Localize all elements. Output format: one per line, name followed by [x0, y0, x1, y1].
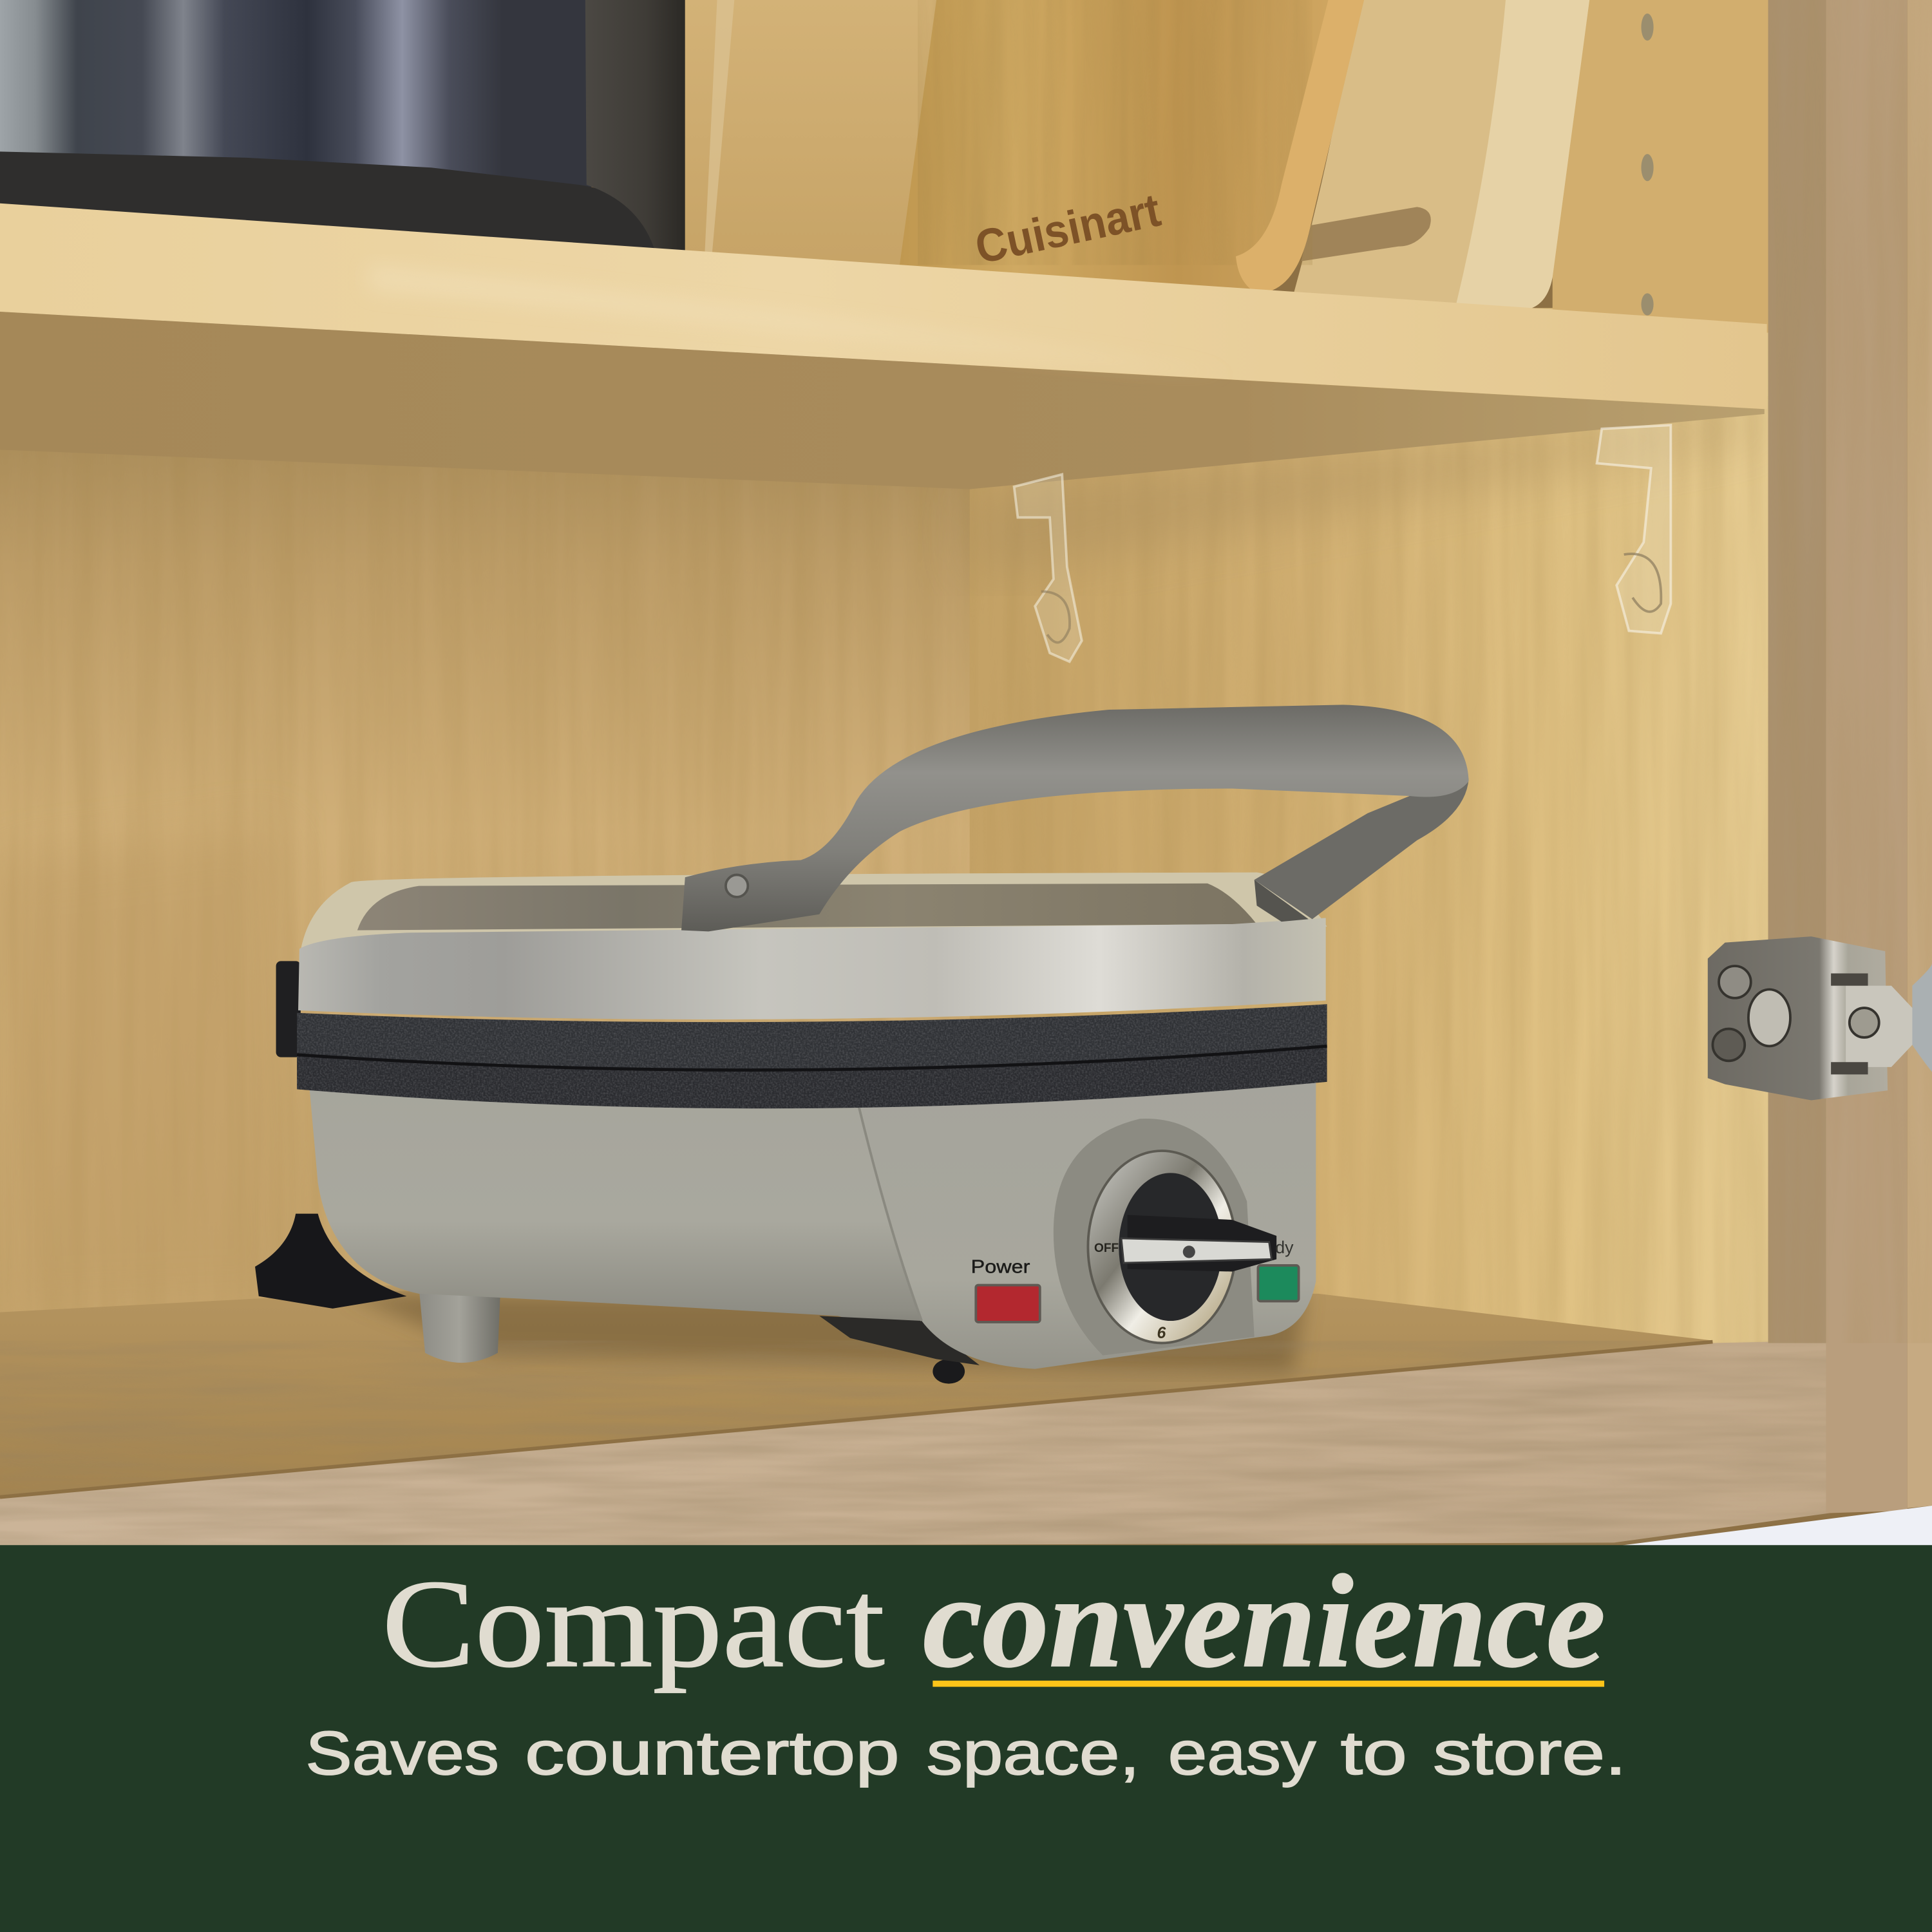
small front foot — [933, 1359, 965, 1384]
panel seam — [859, 1106, 922, 1321]
yellow underline — [933, 1681, 1604, 1687]
floor shelf front edge — [0, 1341, 1830, 1548]
upper shelf contents wall — [1553, 0, 1769, 333]
top shelf front edge — [0, 204, 1767, 409]
lower black band — [297, 1045, 1327, 1108]
subheading: Saves — [305, 1719, 499, 1788]
subheading: space, — [927, 1719, 1140, 1788]
heading word: convenience: convenience — [923, 1548, 1605, 1695]
cabinet floor shelf — [0, 1291, 1712, 1499]
black dial — [1119, 1173, 1222, 1321]
hinge screws — [1712, 966, 1879, 1061]
base underside — [819, 1316, 980, 1365]
rear clip — [276, 961, 301, 1057]
power label: Power — [971, 1256, 1030, 1277]
subheading: to — [1341, 1719, 1407, 1788]
subheading: store. — [1433, 1719, 1627, 1788]
cabinet back wall — [0, 419, 986, 1331]
lid rim — [299, 873, 1327, 959]
rear foot — [419, 1287, 500, 1363]
top shelf underside — [0, 312, 1765, 489]
cabinet side wall — [970, 308, 1770, 1368]
subheading: easy — [1168, 1719, 1316, 1788]
bamboo cutting board — [900, 0, 1364, 293]
lid stainless band — [298, 918, 1326, 1019]
red power light — [976, 1285, 1040, 1322]
hinge — [1708, 936, 1932, 1101]
green ready light — [1258, 1265, 1299, 1301]
cabinet frame right — [1768, 0, 1932, 1513]
heading — [382, 1548, 1605, 1695]
dial number: 6 — [1157, 1324, 1166, 1342]
beech cutting board — [1294, 0, 1589, 310]
pale cutting board — [685, 0, 949, 277]
dial recess — [1054, 1119, 1255, 1356]
dial lever — [1121, 1215, 1276, 1271]
panel: caption band — [0, 1545, 1932, 1932]
band texture — [297, 1005, 1327, 1108]
ready label fragment: dy — [1275, 1238, 1294, 1257]
upper black band — [297, 1004, 1327, 1070]
lower body — [308, 1072, 936, 1343]
white sliver — [1614, 1506, 1932, 1546]
OFF mark: OFF — [1094, 1242, 1119, 1255]
lid top surface — [357, 884, 1257, 931]
peg holes — [1641, 14, 1654, 316]
subheading — [305, 1719, 1627, 1788]
subheading: countertop — [525, 1719, 900, 1788]
heading word: Compact: Compact — [382, 1555, 885, 1694]
shelf clip right — [1597, 425, 1671, 633]
power cord — [255, 1214, 406, 1309]
dark pot on top shelf — [0, 0, 685, 259]
waffle maker — [255, 705, 1469, 1384]
board logo: Cuisinart — [971, 184, 1165, 274]
chrome dial ring — [1088, 1151, 1236, 1343]
control panel — [857, 1072, 1316, 1369]
handle — [681, 705, 1469, 931]
shelf clip left — [1014, 475, 1082, 661]
board handle slot — [1301, 207, 1431, 261]
